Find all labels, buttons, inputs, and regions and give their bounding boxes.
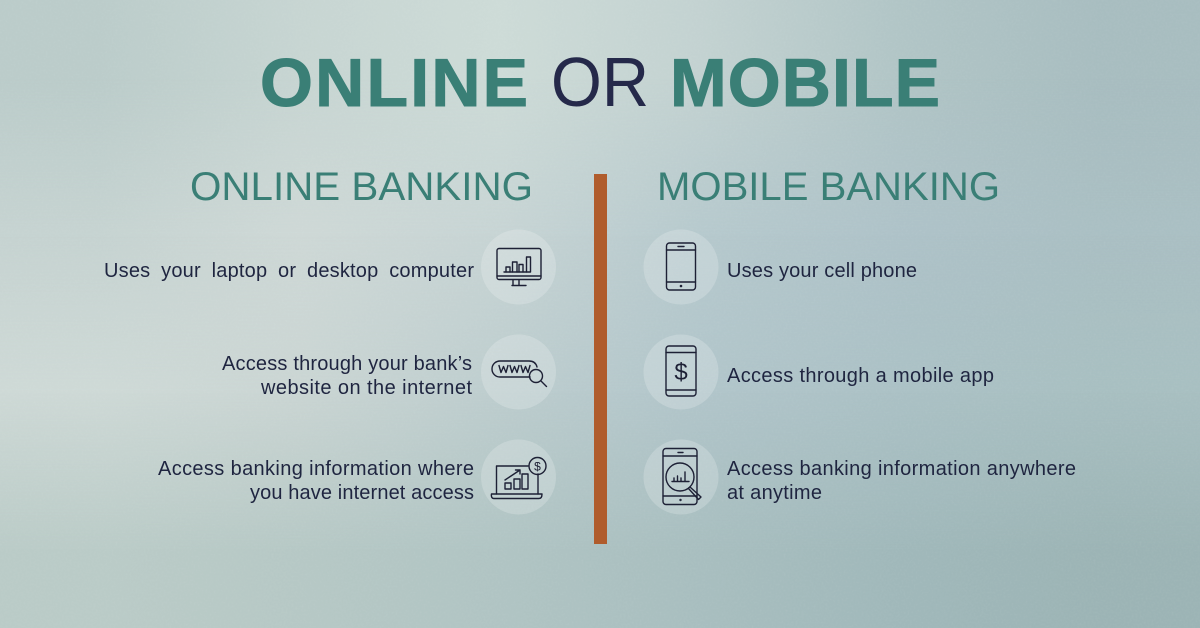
icon: phone with magnifier: [644, 440, 718, 514]
text: anywhere anytime: Access banking information anywhere: [727, 458, 1076, 480]
text: internet access: you have internet access: [250, 482, 474, 504]
heading: online banking: ONLINE BANKING: [190, 165, 533, 209]
center divider: [594, 174, 607, 544]
text: laptop or desktop: Uses your laptop or desktop computer: [104, 260, 474, 282]
icon: phone with dollar: [644, 334, 718, 410]
dollar sign: $: [674, 359, 688, 386]
panel: mobile banking items: [644, 230, 1076, 514]
text: bank website: Access through your bank’s: [222, 353, 472, 375]
title: [260, 43, 940, 121]
heading: mobile banking: MOBILE BANKING: [657, 165, 1000, 209]
icon: phone: [644, 230, 718, 304]
text: cell phone: Uses your cell phone: [727, 260, 917, 282]
text: internet access: [158, 458, 474, 504]
text: bank website: website on the internet: [260, 377, 472, 399]
icon: desktop monitor: [481, 230, 556, 304]
icon: laptop with chart and dollar: [481, 440, 556, 514]
title: MOBILE: [670, 45, 940, 121]
dollar mark: $: [534, 460, 541, 474]
title: ONLINE: [260, 45, 528, 121]
text: internet access: Access banking information where: [158, 458, 474, 480]
title: OR: [551, 43, 649, 121]
panel: online banking items: [104, 230, 556, 514]
icon: www search: [481, 334, 556, 410]
text: anywhere anytime: [727, 458, 1076, 504]
text: bank website: [222, 353, 472, 399]
text: mobile app: Access through a mobile app: [727, 365, 994, 387]
text: anywhere anytime: at anytime: [727, 482, 822, 504]
